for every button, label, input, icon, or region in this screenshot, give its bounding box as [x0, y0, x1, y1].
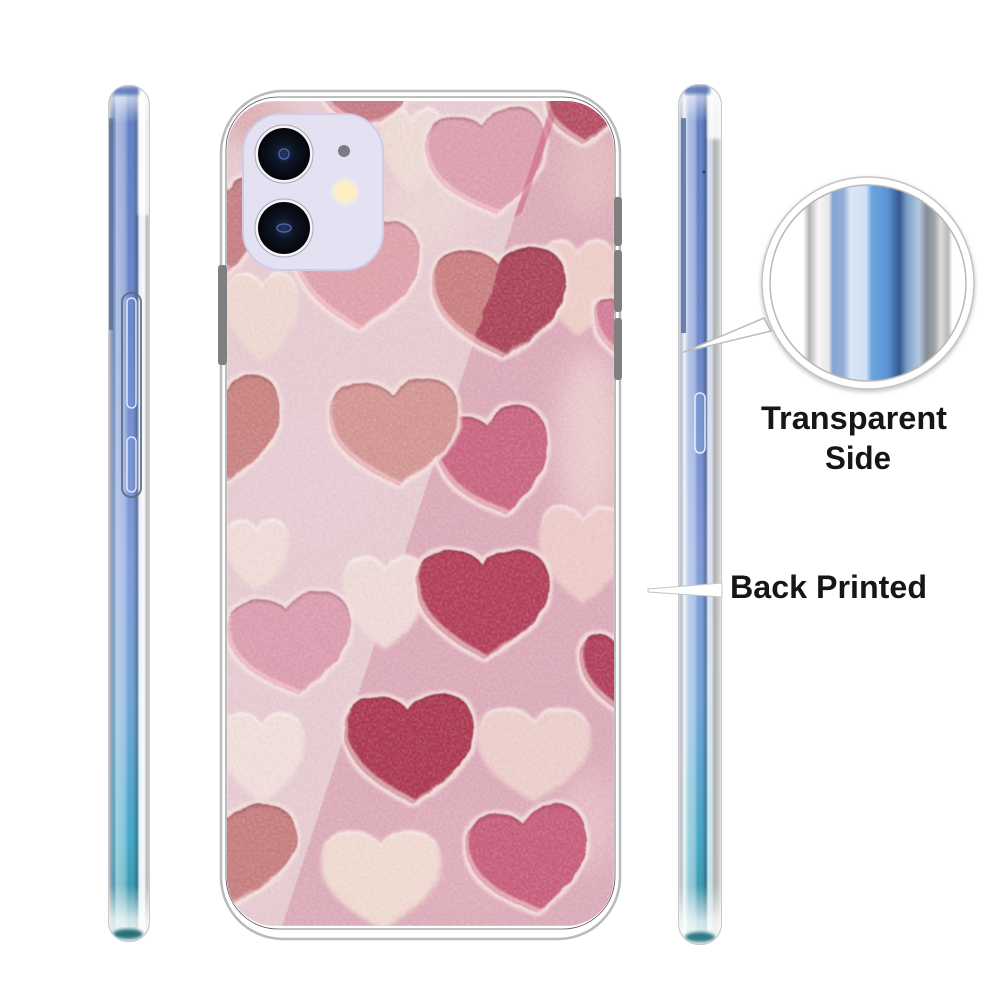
- paint texture: [227, 101, 614, 926]
- back view of phone case: [159, 75, 652, 939]
- heart: right edge lower: [574, 628, 614, 713]
- case frame: [221, 91, 620, 939]
- side grip buttons: [218, 197, 622, 380]
- label: Transparent Side: Side: [825, 440, 891, 476]
- microphone: [338, 145, 350, 157]
- pale background hearts: [220, 107, 627, 929]
- camera-side dot: [702, 170, 706, 174]
- right side view of phone case: [678, 84, 722, 945]
- power button outline: [695, 393, 705, 453]
- heart: bottom left: [227, 800, 300, 907]
- heart: right edge upper: [590, 294, 614, 358]
- lower lens: [255, 199, 313, 257]
- callout: transparent side magnifier: [684, 177, 975, 392]
- pointer: back printed: [648, 583, 722, 597]
- label: Back Printed: Back Printed: [730, 569, 927, 605]
- heart: below camera: [296, 220, 420, 330]
- flash: [331, 178, 359, 206]
- heart: dark lower: [342, 691, 478, 807]
- heart: centre salmon: [327, 376, 464, 490]
- heart: split reflection: [430, 245, 570, 361]
- heart: behind camera: [227, 174, 249, 276]
- label: Transparent Side: [761, 400, 947, 476]
- magnified stripes: [804, 186, 952, 380]
- camera module: [243, 114, 383, 270]
- label: Transparent Side: Transparent: [761, 400, 947, 436]
- heart: left pink: [227, 587, 354, 698]
- heart: mid right pink: [434, 400, 552, 518]
- heart: top centre: [424, 103, 550, 218]
- heart: dark centre: [416, 549, 550, 659]
- pointer: [684, 318, 771, 352]
- printed heart artwork: [227, 101, 614, 926]
- heart: top right dark: [543, 101, 610, 148]
- glass reflection edge: [514, 108, 555, 218]
- side buttons, left view: [122, 293, 141, 497]
- mottled paint patches: [227, 101, 614, 868]
- heart: left edge: [227, 371, 283, 484]
- upper lens: [255, 125, 313, 183]
- left side view of phone case: [108, 85, 150, 942]
- heart: bottom right: [461, 798, 591, 917]
- heart: top cropped: [322, 101, 408, 128]
